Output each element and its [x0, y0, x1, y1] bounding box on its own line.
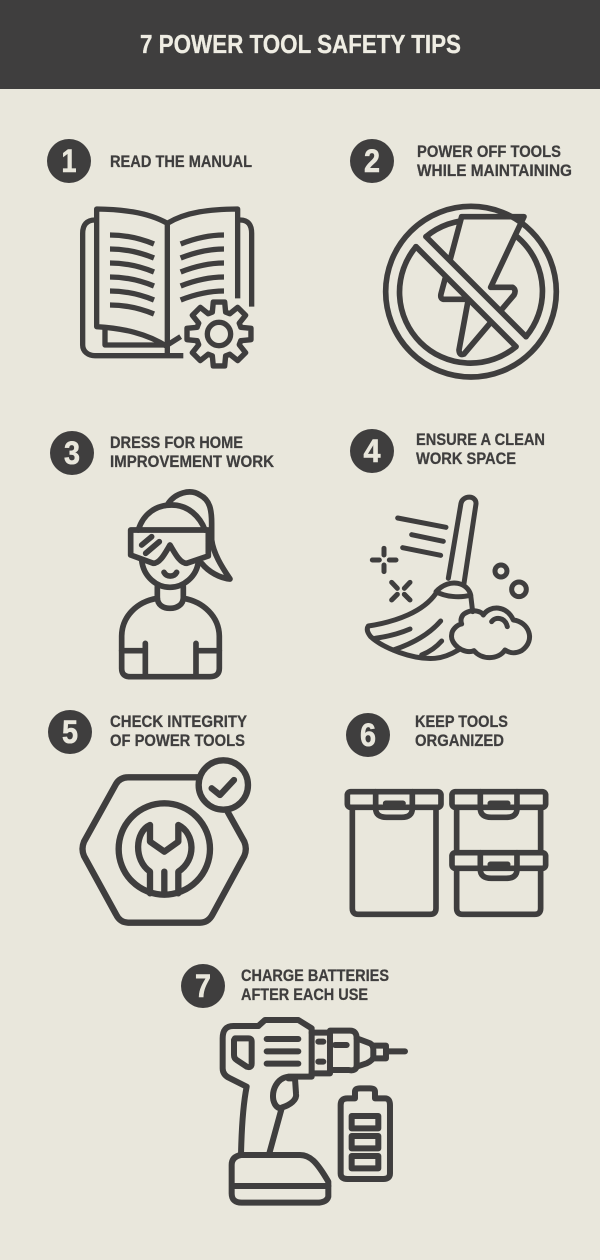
badge 4	[350, 429, 394, 473]
heading 7	[241, 967, 389, 1004]
panel: tip 5 check integrity	[48, 710, 248, 923]
icon: broom sweeping dust	[367, 497, 530, 658]
badge 1: 1	[62, 143, 76, 179]
icon: storage containers	[347, 792, 546, 914]
panel: tip 4 clean work space	[350, 429, 545, 658]
heading 3	[110, 434, 274, 471]
icon: book with gear	[83, 209, 252, 366]
icon: person with goggles	[122, 492, 230, 677]
heading 1: READ THE MANUAL	[110, 153, 252, 171]
panel: tip 1 read the manual	[47, 139, 252, 366]
badge 4: 4	[364, 433, 381, 469]
heading 5	[110, 713, 247, 750]
badge 6	[346, 713, 390, 757]
heading 7: CHARGE BATTERIES	[241, 967, 389, 985]
heading 2: WHILE MAINTAINING	[417, 162, 572, 180]
title banner: 7 POWER TOOL SAFETY TIPS	[140, 31, 461, 59]
heading 4	[416, 431, 545, 468]
badge 2: 2	[364, 143, 380, 179]
badge 7	[181, 964, 225, 1008]
panel: tip 3 dress for work	[50, 431, 274, 677]
heading 2	[417, 143, 572, 180]
heading 3: DRESS FOR HOME	[110, 434, 243, 452]
heading 4: WORK SPACE	[416, 450, 516, 468]
heading 3: IMPROVEMENT WORK	[110, 453, 274, 471]
heading 2: POWER OFF TOOLS	[417, 143, 561, 161]
panel: tip 2 power off tools	[350, 139, 572, 377]
icon: cordless drill	[223, 1020, 405, 1203]
title banner	[0, 0, 600, 89]
heading 6: KEEP TOOLS	[415, 713, 508, 731]
badge 7: 7	[195, 968, 211, 1004]
heading 5: OF POWER TOOLS	[110, 732, 245, 750]
panel: tip 7 charge batteries	[181, 964, 405, 1203]
heading 6	[415, 713, 508, 750]
heading 6: ORGANIZED	[415, 732, 504, 750]
panel: tip 6 keep tools organized	[346, 713, 546, 914]
heading 4: ENSURE A CLEAN	[416, 431, 545, 449]
icon: battery	[341, 1088, 390, 1179]
heading 5: CHECK INTEGRITY	[110, 713, 247, 731]
icon: hex nut with wrench and check	[82, 760, 248, 923]
badge 6: 6	[360, 717, 376, 753]
badge 3: 3	[64, 435, 80, 471]
heading 7: AFTER EACH USE	[241, 986, 368, 1004]
badge 3	[50, 431, 94, 475]
badge 5: 5	[62, 714, 78, 750]
badge 2	[350, 139, 394, 183]
icon: crossed out lightning bolt	[386, 206, 556, 377]
badge 1	[47, 139, 91, 183]
badge 5	[48, 710, 92, 754]
